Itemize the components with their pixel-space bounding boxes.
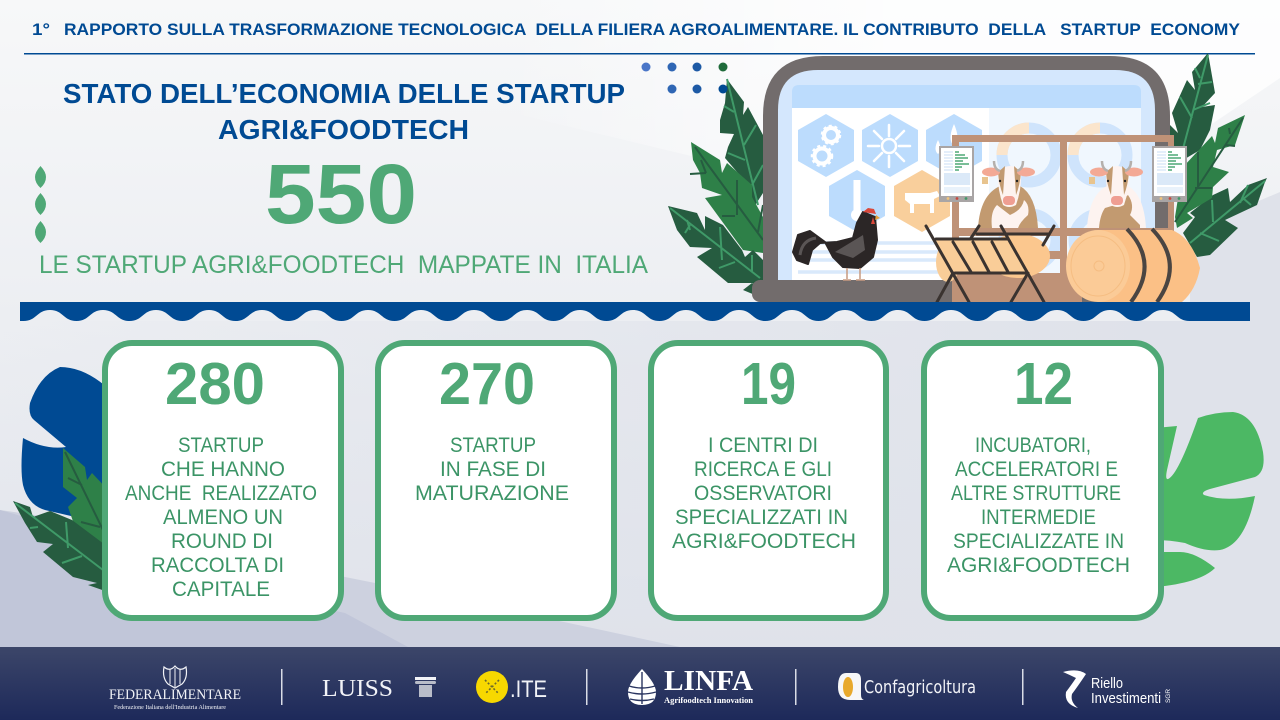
description 270	[415, 433, 569, 505]
subtitle: mapped startups: LE STARTUP AGRI&FOODTECH MAPPATE IN ITALIA	[39, 251, 648, 279]
logo: Luiss: LUISS	[322, 676, 393, 702]
logo: Federalimentare	[109, 666, 241, 711]
icon: small leaves bottom left	[13, 448, 108, 592]
icon: cow left	[978, 161, 1038, 228]
icon: leaves behind laptop	[668, 53, 1267, 300]
icon: blue monstera leaf	[22, 367, 110, 525]
logo: Riello Investimenti: SGR	[1165, 689, 1172, 703]
logo: Linfa: LINFA	[664, 665, 753, 697]
logo: Riello Investimenti	[1063, 670, 1172, 708]
fence	[952, 135, 1174, 302]
description 280: ANCHE REALIZZATO	[125, 481, 317, 505]
big number 550: 550	[265, 147, 417, 241]
description 19: SPECIALIZZATI IN	[675, 505, 848, 529]
description 19: AGRI&FOODTECH	[672, 529, 856, 553]
description 270: IN FASE DI	[440, 457, 546, 481]
description 12: SPECIALIZZATE IN	[953, 529, 1124, 553]
logo: Riello Investimenti: Investimenti	[1091, 690, 1161, 707]
logo: Luiss	[322, 676, 436, 702]
logo: X.ITE: .ITE	[510, 676, 547, 703]
decorative seeds	[35, 166, 46, 243]
description 280: CHE HANNO	[161, 457, 285, 481]
panel: 12 incubators	[924, 343, 1161, 618]
description 12: AGRI&FOODTECH	[947, 553, 1130, 577]
number 280: 280	[165, 351, 265, 417]
heading: state of the startup economy	[63, 78, 625, 145]
panel: 280 startup	[105, 343, 341, 618]
description 12	[947, 433, 1130, 577]
laptop frame and screen	[752, 56, 1170, 302]
wavy ribbon	[20, 302, 1250, 321]
number 270: 270	[439, 351, 535, 417]
description 280: CAPITALE	[172, 577, 270, 601]
description 270: STARTUP	[450, 433, 536, 457]
logo: Federalimentare: FEDERALIMENTARE	[109, 687, 241, 703]
logo: X.ITE	[476, 671, 547, 703]
decorative dots	[642, 62, 728, 94]
logo: Confagricoltura: Confagricoltura	[864, 677, 976, 698]
description 19	[672, 433, 856, 553]
description 270: MATURAZIONE	[415, 481, 569, 505]
logo: Linfa: Agrifoodtech Innovation	[664, 695, 753, 705]
description 19: OSSERVATORI	[694, 481, 832, 505]
logo: Riello Investimenti: Riello	[1091, 675, 1123, 692]
description 280: STARTUP	[178, 433, 264, 457]
heading: state of the startup economy: AGRI&FOODTECH	[218, 114, 469, 145]
icon: black rooster	[793, 208, 880, 280]
dashboard hexagon icons	[798, 114, 1127, 272]
description 12: INCUBATORI,	[975, 433, 1091, 457]
heading: state of the startup economy: STATO DELL’ECONOMIA DELLE STARTUP	[63, 78, 625, 109]
logo: Federalimentare: Federazione Italiana dell'Industria Alimentare	[114, 704, 226, 711]
icon: cow right	[1087, 161, 1146, 228]
panel: 270 startup	[378, 343, 614, 618]
description 19: RICERCA E GLI	[694, 457, 832, 481]
description 280	[125, 433, 317, 601]
header title: 1°	[32, 20, 50, 39]
footer band with partner logos	[0, 647, 1280, 720]
illustration: laptop, farm animals and hay	[668, 53, 1267, 302]
number 12: 12	[1014, 351, 1073, 417]
description 12: ACCELERATORI E	[955, 457, 1118, 481]
icon: green monstera leaf	[1155, 412, 1264, 587]
icon: hay feeder rack	[926, 226, 1054, 302]
description 19: I CENTRI DI	[708, 433, 818, 457]
description 280: RACCOLTA DI	[151, 553, 284, 577]
header title: RAPPORTO SULLA TRASFORMAZIONE TECNOLOGICA DELLA FILIERA AGROALIMENTARE. IL CONTRIBUTO DELLA STARTUP ECONOMY	[64, 20, 1241, 39]
description 280: ALMENO UN	[163, 505, 283, 529]
number 19: 19	[741, 351, 796, 417]
description 12: ALTRE STRUTTURE	[951, 481, 1121, 505]
description 280: ROUND DI	[171, 529, 273, 553]
icon: sensor tablets	[940, 147, 1186, 201]
logo: Linfa	[628, 665, 753, 705]
logo: Confagricoltura	[838, 673, 976, 700]
icon: hay bale	[1066, 229, 1200, 302]
description 12: INTERMEDIE	[981, 505, 1096, 529]
panel: 19 research centres	[651, 343, 886, 618]
